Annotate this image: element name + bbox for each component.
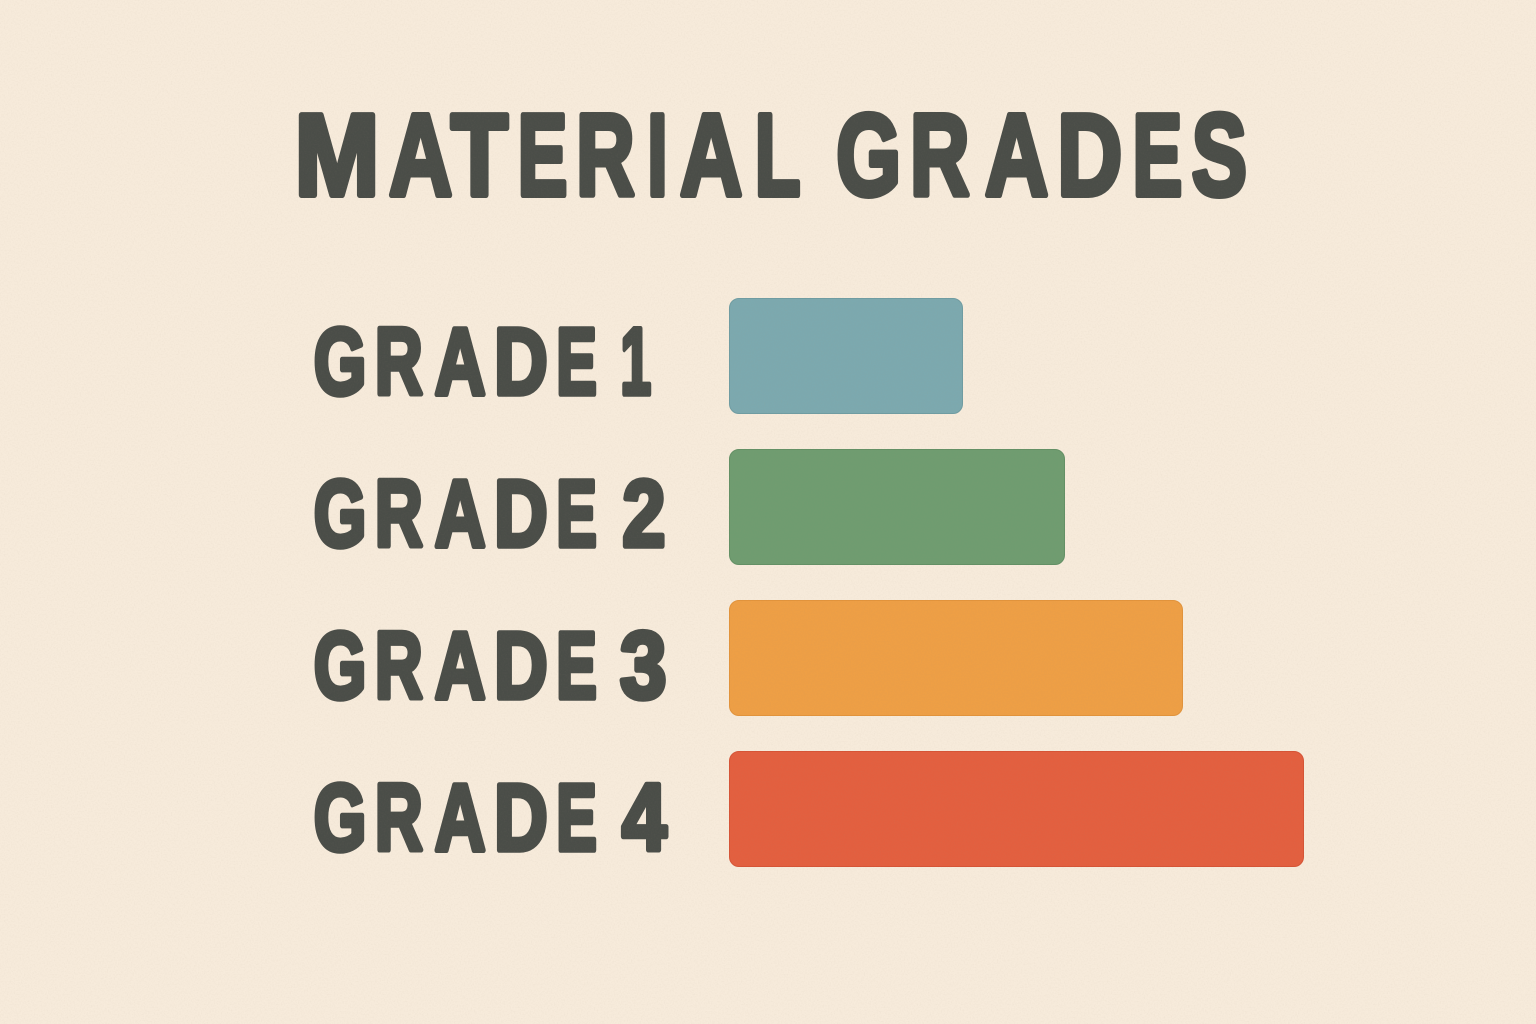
title: E [1133,90,1182,220]
label: grade 4: D [494,765,548,871]
title: A [985,90,1048,220]
label: grade 4: E [556,765,597,871]
label: grade 2: 2 [622,461,666,567]
label: grade 3: 3 [620,613,666,719]
label: grade 2: D [494,461,548,567]
label: grade 1: G [314,309,366,415]
title: G [836,90,901,220]
label: grade 3: D [494,613,548,719]
title: A [389,90,452,220]
bar: grade 3 [730,600,1182,716]
label: grade 4: G [314,765,366,871]
title: R [576,90,635,220]
row: grade 4 [314,752,1304,871]
row: grade 2 [314,450,1064,567]
label: grade 2: A [435,461,486,567]
row: grade 1 [314,298,962,415]
label: grade 1: R [375,309,423,415]
title: D [1057,90,1122,220]
title: M [295,90,379,220]
label: grade 3: G [314,613,366,719]
row: grade 3 [314,600,1182,719]
title: T [451,90,508,220]
label: grade 3: E [556,613,597,719]
title: R [910,90,970,220]
label: grade 3: A [435,613,486,719]
label: grade 1: 1 [620,309,651,415]
title: S [1192,90,1247,220]
label: grade 1: A [435,309,486,415]
label: grade 1: E [556,309,597,415]
bar: grade 2 [730,450,1064,564]
label: grade 4: R [375,765,423,871]
label: grade 2: G [314,461,366,567]
bar: grade 4 [730,752,1304,866]
label: grade 2: R [375,461,423,567]
title: L [755,90,799,220]
title: I [647,90,668,220]
label: grade 4: A [435,765,486,871]
title: A [680,90,742,220]
label: grade 2: E [556,461,597,567]
title: E [518,90,567,220]
label: grade 3: R [375,613,423,719]
label: grade 1: D [494,309,548,415]
label: grade 4: 4 [622,765,667,871]
bar: grade 1 [730,298,962,414]
